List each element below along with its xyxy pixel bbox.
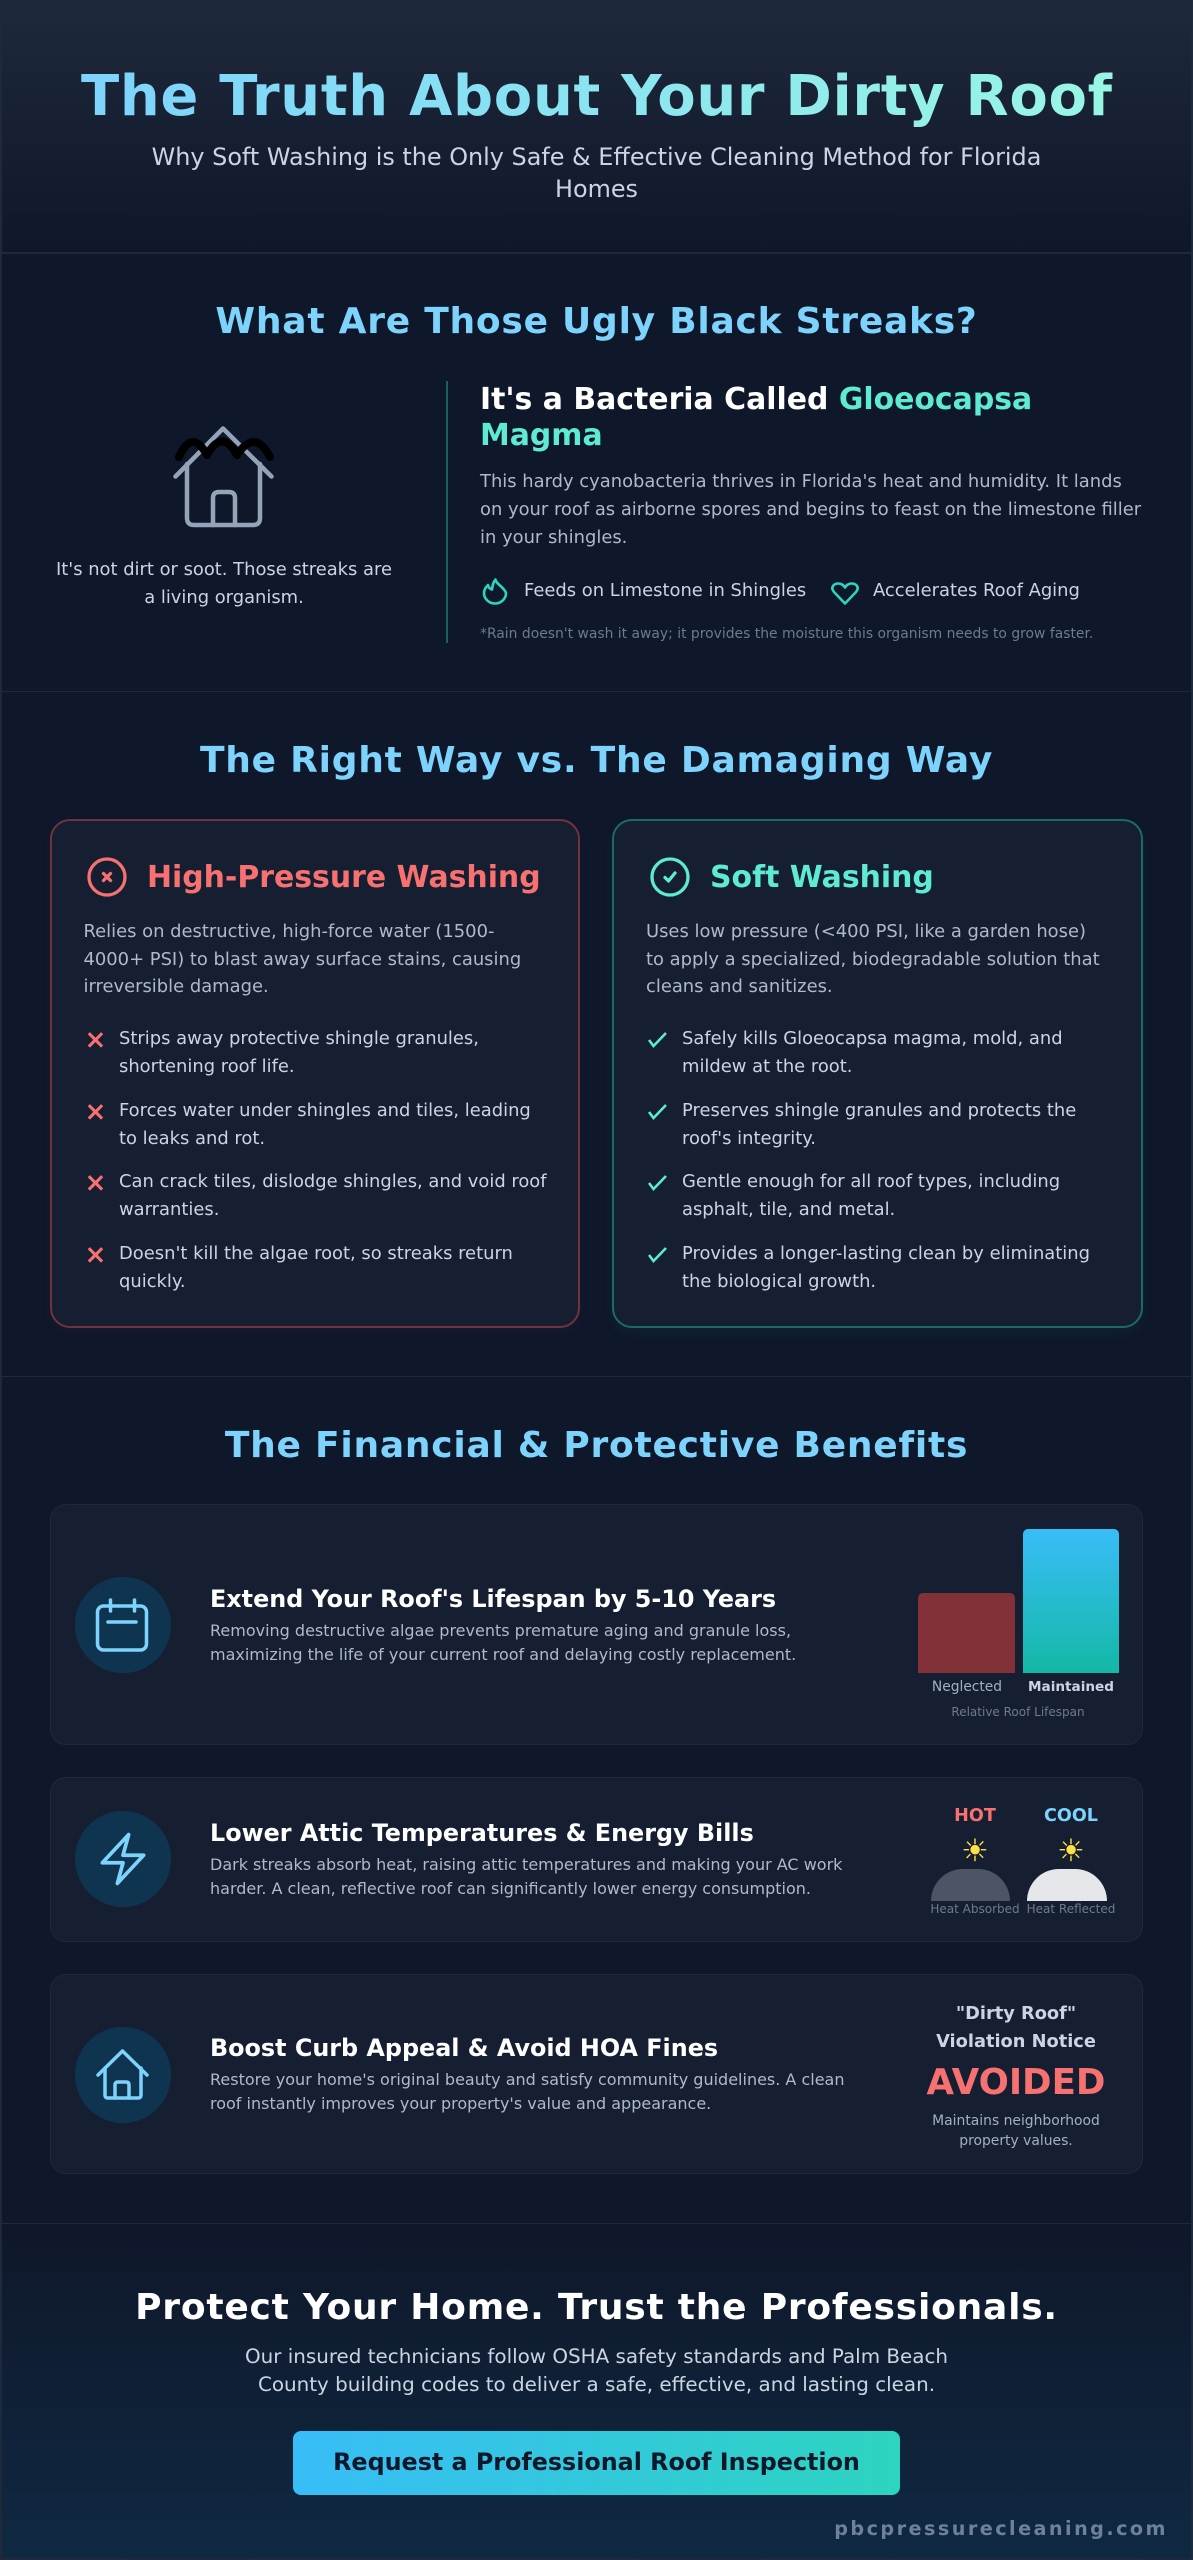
list: soft washing benefits: Provides a longer-lasting clean by eliminating bbox=[682, 1243, 1090, 1264]
benefit text: attic: harder. A clean, reflective roof can significantly lower energy consumption. bbox=[210, 1879, 811, 1898]
chart caption: Relative Roof Lifespan bbox=[951, 1705, 1085, 1719]
benefit text: curb appeal: Restore your home's original beauty and satisfy community guidelines. A clean bbox=[210, 2070, 844, 2089]
list: high-pressure damage: Forces water under shingles and tiles, leading bbox=[119, 1100, 531, 1121]
subtitle: Homes bbox=[555, 175, 638, 203]
benefit text: lifespan: maximizing the life of your current roof and delaying costly replacement. bbox=[210, 1645, 796, 1664]
cta heading: Protect Your Home. Trust the Professionals. bbox=[135, 2287, 1058, 2328]
paragraph: high-pressure bbox=[84, 921, 521, 997]
cta button: Request a Professional Roof Inspection bbox=[333, 2448, 860, 2476]
icon: home bbox=[75, 2027, 171, 2123]
heading: right way vs damaging way: The Right Way vs. The Damaging Way bbox=[200, 740, 993, 781]
paragraph: soft washing: cleans and sanitizes. bbox=[646, 976, 833, 997]
icon: bolt bbox=[75, 1811, 171, 1907]
list: soft washing benefits: Preserves shingle granules and protects the bbox=[682, 1100, 1076, 1121]
benefit title: curb appeal: Boost Curb Appeal & Avoid HOA Fines bbox=[210, 2034, 718, 2062]
benefit title: lifespan: Extend Your Roof's Lifespan by 5-10 Years bbox=[210, 1585, 776, 1613]
cta button bbox=[293, 2431, 900, 2495]
panel: high-pressure washing bbox=[50, 819, 580, 1328]
callout heading bbox=[936, 2003, 1096, 2052]
callout heading: "Dirty Roof" bbox=[956, 2003, 1076, 2024]
subheading: bacteria name: It's a Bacteria Called Gloeocapsa bbox=[480, 382, 1032, 417]
icon: sun hot: ☀ bbox=[961, 1833, 989, 1869]
heading: what are those streaks: What Are Those Ugly Black Streaks? bbox=[215, 301, 978, 342]
dome: clean roof bbox=[1027, 1869, 1107, 1901]
bar label: maintained: Maintained bbox=[1028, 1679, 1114, 1695]
icon: check circle bbox=[650, 857, 690, 897]
bar label: neglected: Neglected bbox=[932, 1679, 1002, 1695]
bar: neglected bbox=[918, 1593, 1015, 1673]
paragraph: high-pressure: 4000+ PSI) to blast away surface stains, causing bbox=[84, 949, 521, 970]
benefit text: curb appeal: roof instantly improves your property's value and appearance. bbox=[210, 2094, 711, 2113]
list: soft washing benefits: roof's integrity. bbox=[682, 1128, 816, 1149]
icon: sun cool: ☀ bbox=[1057, 1833, 1085, 1869]
paragraph: cyanobacteria: in your shingles. bbox=[480, 527, 627, 548]
list: high-pressure damage bbox=[85, 1026, 547, 1292]
label: cool: COOL bbox=[1044, 1806, 1098, 1826]
paragraph: cyanobacteria: on your roof as airborne spores and begins to feast on the limestone filler bbox=[480, 499, 1141, 520]
feature: aging: Accelerates Roof Aging bbox=[873, 580, 1080, 601]
panel heading: soft washing: Soft Washing bbox=[710, 860, 934, 895]
paragraph: high-pressure: Relies on destructive, high-force water (1500- bbox=[84, 921, 494, 942]
list: high-pressure damage: ✕ bbox=[85, 1098, 106, 1127]
icon: flame bbox=[482, 578, 508, 605]
benefit text: attic bbox=[210, 1855, 842, 1898]
cta paragraph bbox=[245, 2345, 948, 2396]
panel: soft washing bbox=[612, 819, 1143, 1328]
vertical divider bbox=[446, 381, 448, 643]
list: soft washing benefits: the biological growth. bbox=[682, 1271, 876, 1292]
callout note: property values. bbox=[959, 2133, 1073, 2149]
label: heat reflected: Heat Reflected bbox=[1027, 1902, 1115, 1916]
cta paragraph: County building codes to deliver a safe, effective, and lasting clean. bbox=[258, 2373, 935, 2396]
list: high-pressure damage: warranties. bbox=[119, 1199, 219, 1220]
icon: house with black streaks bbox=[173, 426, 274, 528]
list: high-pressure damage: ✕ bbox=[85, 1026, 106, 1055]
label: heat absorbed: Heat Absorbed bbox=[930, 1902, 1020, 1916]
caption: living organism: It's not dirt or soot. Those streaks are bbox=[56, 559, 392, 580]
list: high-pressure damage: Doesn't kill the algae root, so streaks return bbox=[119, 1243, 513, 1264]
list: soft washing benefits: asphalt, tile, and metal. bbox=[682, 1199, 895, 1220]
paragraph: cyanobacteria: This hardy cyanobacteria thrives in Florida's heat and humidity. It lands bbox=[480, 471, 1122, 492]
dome: dirty roof bbox=[931, 1869, 1010, 1901]
benefit title: attic: Lower Attic Temperatures & Energy Bills bbox=[210, 1819, 754, 1847]
paragraph: high-pressure: irreversible damage. bbox=[84, 976, 269, 997]
footnote: *Rain doesn't wash it away; it provides the moisture this organism needs to grow faster. bbox=[480, 626, 1093, 642]
callout note bbox=[932, 2113, 1100, 2149]
subtitle: Why Soft Washing is the Only Safe & Effective Cleaning Method for Florida bbox=[152, 143, 1041, 171]
paragraph: soft washing: to apply a specialized, biodegradable solution that bbox=[646, 949, 1100, 970]
subheading: bacteria name: Magma bbox=[480, 418, 603, 453]
benefit text: attic: Dark streaks absorb heat, raising attic temperatures and making your AC work bbox=[210, 1855, 842, 1874]
heading: financial benefits: The Financial & Protective Benefits bbox=[225, 1425, 968, 1466]
list: high-pressure damage: to leaks and rot. bbox=[119, 1128, 265, 1149]
list: high-pressure damage: shortening roof life. bbox=[119, 1056, 295, 1077]
label: hot: HOT bbox=[954, 1806, 996, 1826]
list: soft washing benefits: mildew at the root. bbox=[682, 1056, 852, 1077]
bar chart: relative roof lifespan bbox=[918, 1529, 1119, 1719]
subheading: bacteria name bbox=[480, 382, 1032, 453]
icon: heart bbox=[831, 582, 859, 605]
panel: lifespan bbox=[50, 1504, 1143, 1745]
caption: living organism bbox=[56, 559, 392, 608]
subtitle bbox=[152, 143, 1041, 203]
callout heading: Violation Notice bbox=[936, 2031, 1096, 2052]
bar: maintained bbox=[1023, 1529, 1119, 1673]
panel heading: high-pressure: High-Pressure Washing bbox=[147, 860, 541, 895]
benefit text: curb appeal bbox=[210, 2070, 844, 2113]
section divider: comparison bbox=[0, 1376, 1193, 1377]
list: high-pressure damage: ✕ bbox=[85, 1169, 106, 1198]
callout note: Maintains neighborhood bbox=[932, 2113, 1100, 2129]
panel: curb appeal bbox=[50, 1974, 1143, 2174]
section divider band: streaks bbox=[0, 691, 1193, 692]
list: soft washing benefits: Gentle enough for all roof types, including bbox=[682, 1171, 1060, 1192]
callout result: AVOIDED bbox=[927, 2062, 1105, 2103]
callout: violation avoided bbox=[926, 2003, 1105, 2149]
cta paragraph: Our insured technicians follow OSHA safety standards and Palm Beach bbox=[245, 2345, 948, 2368]
paragraph: soft washing bbox=[646, 921, 1100, 997]
list: soft washing benefits bbox=[648, 1028, 1090, 1292]
website url: pbcpressurecleaning.com bbox=[834, 2517, 1168, 2540]
list: soft washing benefits: Safely kills Gloeocapsa magma, mold, and bbox=[682, 1028, 1063, 1049]
icon: x circle bbox=[87, 857, 127, 897]
list: high-pressure damage: Can crack tiles, dislodge shingles, and void roof bbox=[119, 1171, 547, 1192]
diagram: hot vs cool roof bbox=[930, 1806, 1115, 1916]
panel: attic temperatures bbox=[50, 1777, 1143, 1942]
benefit text: lifespan: Removing destructive algae prevents premature aging and granule loss, bbox=[210, 1621, 791, 1640]
caption: living organism: a living organism. bbox=[144, 587, 304, 608]
list: high-pressure damage: quickly. bbox=[119, 1271, 186, 1292]
cta background bbox=[0, 2223, 1193, 2560]
header background bbox=[0, 0, 1193, 254]
list: high-pressure damage: Strips away protective shingle granules, bbox=[119, 1028, 479, 1049]
paragraph: cyanobacteria bbox=[480, 471, 1142, 548]
benefit text: lifespan bbox=[210, 1621, 796, 1664]
list: high-pressure damage: ✕ bbox=[85, 1241, 106, 1270]
feature: limestone: Feeds on Limestone in Shingles bbox=[524, 580, 806, 601]
title: The Truth About Your Dirty Roof bbox=[81, 64, 1113, 129]
icon: calendar bbox=[75, 1577, 171, 1673]
paragraph: soft washing: Uses low pressure (<400 PSI, like a garden hose) bbox=[646, 921, 1086, 942]
